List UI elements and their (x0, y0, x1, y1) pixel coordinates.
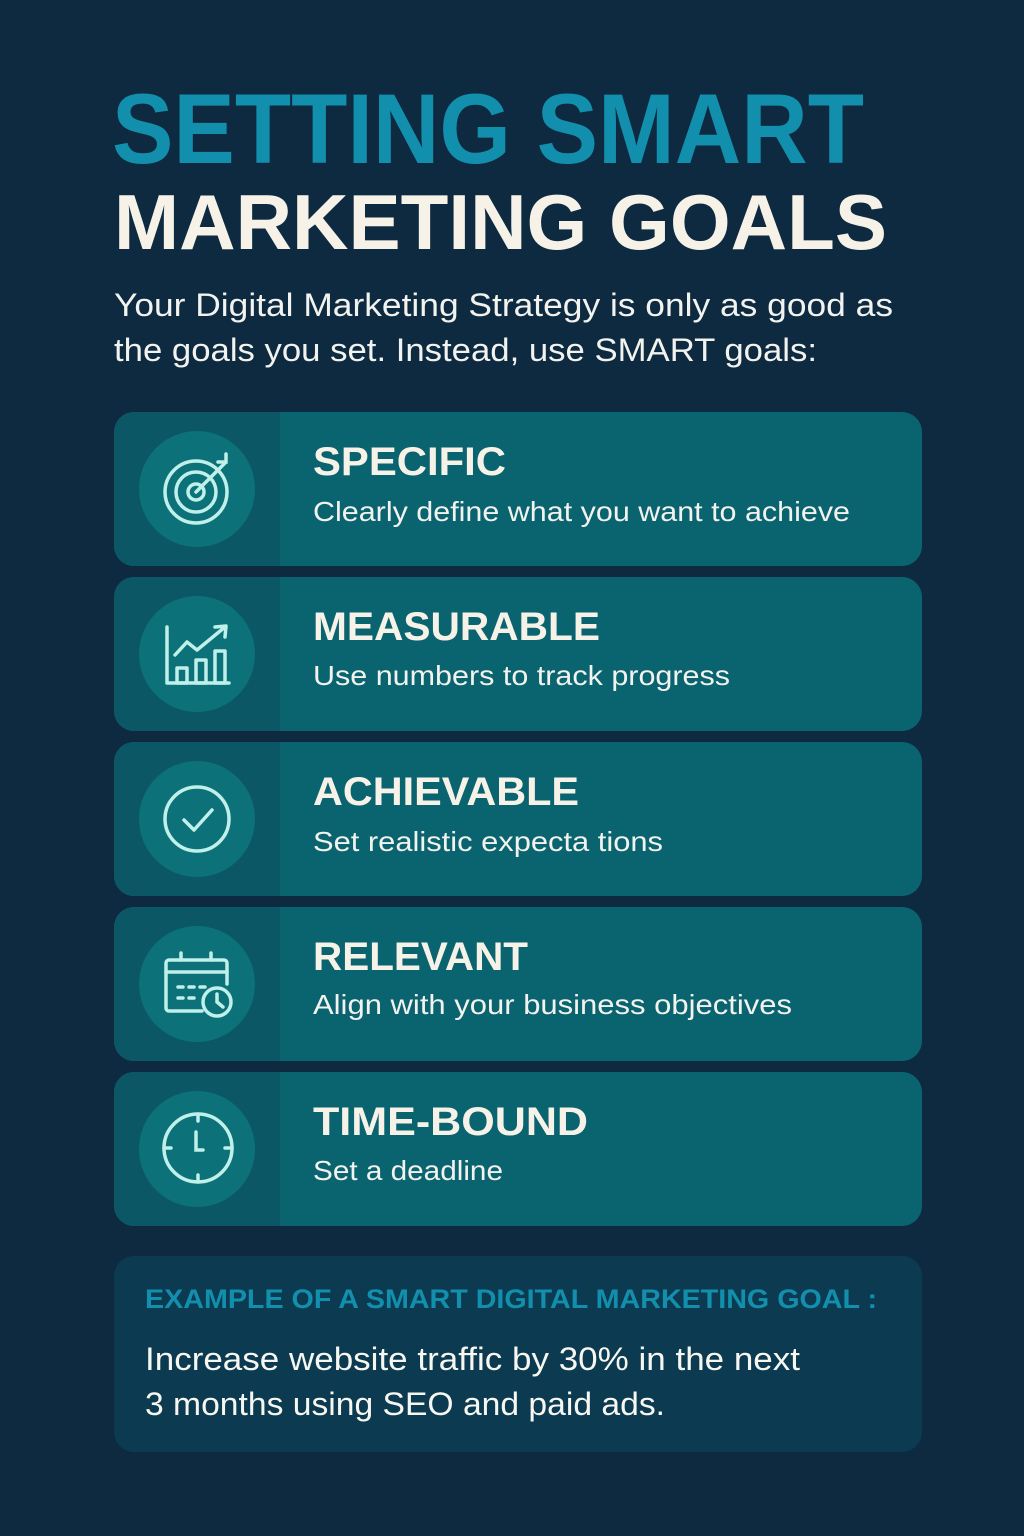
subtitle (114, 287, 893, 368)
card: specific: Clearly define what you want to achieve (313, 496, 850, 527)
card: measurable: Use numbers to track progress (313, 660, 730, 691)
card: achievable (114, 742, 922, 896)
example text (145, 1341, 800, 1422)
card: achievable: Set realistic expecta tions (313, 826, 663, 857)
title (112, 73, 887, 266)
subtitle: Your Digital Marketing Strategy is only as good as (114, 287, 893, 323)
card: time-bound (114, 1072, 922, 1226)
card: relevant: Align with your business objectives (313, 989, 792, 1020)
icon: chart (167, 626, 229, 683)
card: measurable: MEASURABLE (313, 605, 600, 649)
card: specific: SPECIFIC (313, 440, 506, 484)
card: time-bound: TIME-BOUND (313, 1100, 588, 1144)
title: SETTING SMART (112, 73, 864, 184)
icon: check (165, 787, 229, 851)
icon: target (165, 454, 227, 523)
card: relevant (114, 907, 922, 1061)
icon: calendar (166, 953, 231, 1016)
example text: Increase website traffic by 30% in the next (145, 1341, 800, 1377)
example box (114, 1256, 922, 1452)
example heading: EXAMPLE OF A SMART DIGITAL MARKETING GOAL : (145, 1284, 877, 1314)
card: time-bound: Set a deadline (313, 1155, 503, 1186)
card: measurable (114, 577, 922, 731)
title: MARKETING GOALS (114, 178, 887, 266)
icon: clock (164, 1114, 232, 1182)
card: achievable: ACHIEVABLE (313, 770, 579, 814)
card: relevant: RELEVANT (313, 935, 528, 979)
subtitle: the goals you set. Instead, use SMART goals: (114, 332, 817, 368)
example text: 3 months using SEO and paid ads. (145, 1386, 665, 1422)
card: specific (114, 412, 922, 566)
